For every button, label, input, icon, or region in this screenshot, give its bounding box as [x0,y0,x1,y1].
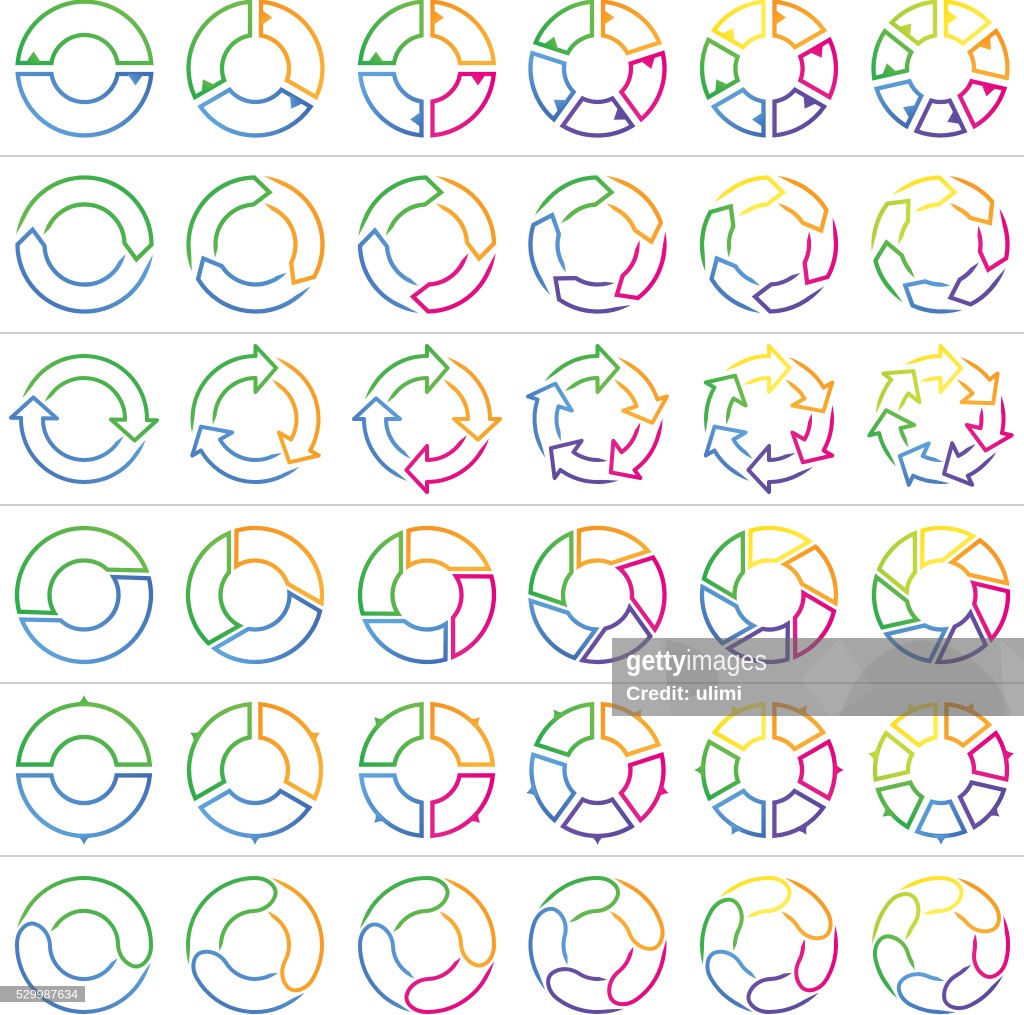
segment: pink [968,206,1016,273]
segment: yellow [750,528,809,566]
segment: blue [516,905,584,993]
segment: blue [20,574,151,664]
segment: green [872,238,921,305]
segment: orange [260,704,325,798]
segment: green [360,2,422,63]
watermark banner [612,638,1024,716]
diagram: 3 segments [164,0,322,160]
segment: lime [863,887,931,959]
segment: yellow [922,528,973,566]
segment: blue [18,775,150,845]
segment: purple [748,971,818,1012]
segment: yellow [714,0,778,53]
segment: yellow [720,878,790,919]
segment: orange [261,2,322,97]
diagram: 4 pinwheel blades [360,528,494,662]
arrow: yellow [726,346,790,392]
segment: purple [760,785,827,852]
segment: green [164,0,278,97]
segment: blue [214,575,322,687]
diagram: 2 segments [18,2,151,135]
segment: orange [935,166,1002,236]
segment: lime [892,0,951,49]
diagram: 4 chevrons [360,178,494,311]
arrow: green [23,355,158,441]
segment: pink [790,740,857,806]
segment: blue [360,924,415,1010]
segment: orange [952,539,1013,602]
diagram: 6 segments [684,0,854,150]
segment: pink [785,212,854,290]
segment: blue [187,917,305,1015]
arrow: orange [607,347,673,430]
watermark credit text: Credit: ulimi [626,684,742,705]
segment: orange [785,545,847,615]
segment: pink [614,53,680,123]
arrow: green [192,346,276,433]
row 3: circular arrows [10,345,1020,510]
segment: orange [774,700,823,749]
diagram: 2 rounded hooks [16,877,152,1013]
segment: blue [508,45,584,119]
segment: pink [774,593,836,663]
arrow: green [546,346,618,393]
diagram: 3 pinwheel blades [163,528,322,687]
row 6: ring segments with rounded hooks [16,869,1016,1015]
diagram: 7 segments [865,0,1023,150]
segment: pink [593,928,683,1011]
arrow: blue [695,415,767,493]
segment: blue [893,962,966,1015]
segment: green [18,877,152,967]
segment: pink [453,576,494,657]
watermark logo text: gettyimages [626,645,767,677]
diagram: 5 segments [508,0,680,159]
diagram: 5 rounded hooks [516,870,683,1015]
segment: blue [16,923,150,1013]
segment: orange [963,31,1023,91]
diagram: 6 pointed segments [681,688,857,852]
segment: purple [542,950,632,1015]
segment: pink [964,730,1024,792]
segment: green [681,734,748,800]
diagram: 7 arrows [861,346,1020,500]
diagram: 4 arrows [354,346,500,492]
segment: green [540,878,618,924]
segment: green [163,695,277,798]
segment: blue [691,575,753,645]
segment: purple [755,271,823,311]
segment: pink [598,225,686,307]
diagram: 2 chevrons [16,176,153,313]
segment: green [18,695,150,765]
diagram: 5 pinwheel blades [517,526,677,679]
diagram: 7 pinwheel blades [869,528,1013,669]
segment: blue [704,246,773,324]
segment: green [189,178,269,271]
image id tag [0,986,85,1002]
row 4: pinwheel segments [17,526,1013,687]
diagram: 2 arrows [10,355,158,483]
segment: pink [790,40,854,106]
image id text: 529987634 [16,988,78,1002]
segment: blue [509,747,584,820]
segment: purple [954,781,1010,833]
segment: purple [935,953,1008,1014]
segment: yellow [899,878,962,916]
segment: blue [899,266,969,325]
segment: green [684,31,748,97]
segment: purple [574,607,652,679]
segment: orange [435,178,494,258]
arrow: pink [962,390,1020,455]
segment: green [867,771,925,832]
segment: green [360,178,441,236]
arrow: purple [934,428,1004,494]
segment: pink [781,916,852,996]
segment: pink [614,755,679,823]
segment: purple [925,613,987,669]
arrow: pink [406,434,487,492]
segment: orange [226,173,347,290]
segment: pink [965,911,1016,980]
segment: green [869,570,917,628]
segment: green [362,878,448,933]
segment: purple [907,93,965,150]
segment: green [686,894,757,974]
segment: blue [714,90,764,135]
segment: green [528,526,586,604]
segment: pink [954,79,1004,131]
segment: blue [515,211,583,296]
segment: green [188,878,276,965]
row 2: ring segments with chevron tips [16,165,1016,336]
segment: green [17,526,148,616]
segment: purple [547,252,635,334]
diagram: 7 chevrons [859,166,1016,325]
diagram: 6 chevrons [684,165,854,324]
arrow: blue [890,434,961,500]
segment: orange [432,2,494,63]
segment: orange [228,877,347,996]
segment: yellow [715,178,783,218]
diagram: 5 chevrons [515,166,686,334]
arrow: orange [233,357,350,473]
segment: yellow [711,688,778,755]
segment: orange [765,165,834,243]
segment: orange [603,704,658,755]
arrow: purple [748,446,812,492]
arrow: orange [939,346,1010,418]
segment: purple [557,84,632,159]
arrow: purple [538,428,624,508]
diagram: 3 pointed segments [163,695,325,863]
segment: green [360,533,401,614]
arrow: pink [782,395,854,473]
segment: blue [360,74,422,135]
segment: blue [197,59,311,160]
diagram: 6 pinwheel blades [691,527,847,663]
segment: pink [413,253,494,311]
segment: pink [432,775,493,836]
arrow: lime [861,357,932,430]
arrow: blue [512,377,579,460]
diagram: 2 pinwheel blades [17,526,151,664]
row 5: segmented rings with outer points [18,688,1024,863]
arrow: yellow [905,346,961,392]
segment: orange [432,704,493,765]
arrow: blue [354,398,412,479]
diagram: 4 segments [360,2,494,135]
segment: green [163,533,271,645]
segment: orange [767,869,837,950]
segment: green [536,0,602,58]
diagram: 4 rounded hooks [360,878,494,1012]
diagram: 6 rounded hooks [686,869,852,1015]
diagram: 3 rounded hooks [187,877,347,1015]
segment: orange [579,528,648,566]
diagram: 3 chevrons [189,173,347,336]
segment: purple [941,252,1012,311]
segment: blue [701,940,771,1015]
diagram: 2 pointed segments [18,695,150,845]
segment: orange [946,698,989,745]
segment: purple [729,624,788,662]
diagram: 6 arrows [684,345,854,493]
segment: blue [360,231,419,311]
segment: orange [774,2,824,47]
segment: pink [619,556,677,634]
diagram: 3 arrows [182,346,350,510]
row 1: segmented rings with notch marks [18,0,1023,160]
segment: yellow [946,2,989,44]
arrow: orange [771,345,843,423]
segment: green [536,692,602,760]
segment: blue [361,775,422,836]
segment: blue [883,607,945,664]
segment: blue [365,621,446,662]
segment: blue [18,74,151,135]
segment: orange [598,166,666,252]
segment: purple [557,785,632,859]
arrow: green [865,405,922,470]
diagram: 5 pointed segments [509,692,679,859]
segment: lime [859,192,925,262]
segment: yellow [894,178,954,214]
segment: orange [408,528,489,569]
segment: pink [962,583,1010,641]
segment: lime [860,729,916,781]
segment: orange [600,870,668,958]
segment: blue [16,229,151,313]
arrow: pink [596,410,682,490]
segment: blue [908,794,967,855]
segment: blue [196,761,309,863]
arrow: blue [10,397,145,483]
segment: blue [517,589,596,660]
segment: green [18,2,151,63]
segment: green [361,704,422,765]
arrow: green [684,365,756,443]
segment: orange [603,2,659,53]
segment: green [871,931,922,1001]
arrow: green [367,346,448,404]
segment: pink [432,74,494,135]
diagram: 7 rounded hooks [863,871,1016,1015]
segment: orange [236,528,322,603]
segment: lime [877,528,938,592]
segment: orange [938,871,1006,943]
segment: green [684,199,753,277]
diagram: 4 pointed segments [361,704,493,836]
segment: green [537,178,611,224]
segment: yellow [888,688,952,750]
segment: blue [190,219,312,336]
segment: pink [406,957,492,1012]
segment: green [865,26,915,78]
arrow: blue [182,394,299,510]
segment: green [18,176,153,260]
segment: orange [439,880,494,966]
arrow: orange [442,359,500,440]
segment: blue [868,70,925,126]
diagram: 7 pointed segments [860,688,1024,855]
segment: purple [760,84,824,150]
segment: blue [715,791,764,840]
segment: green [702,527,764,597]
diagram: 5 arrows [512,346,682,508]
